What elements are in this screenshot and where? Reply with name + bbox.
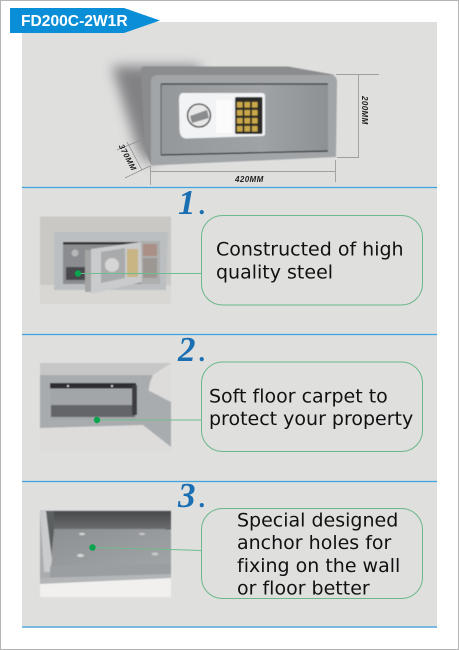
dimension 370MM: 370MM (117, 143, 138, 172)
keypad (235, 97, 262, 134)
lock panel (179, 93, 265, 138)
callout line (78, 272, 202, 274)
callout line (97, 419, 202, 421)
section 3 photo (40, 510, 171, 597)
section divider lines (22, 188, 437, 627)
section 1 photo (40, 216, 171, 304)
callout box (202, 362, 422, 452)
callout text: anchor holes for (237, 532, 392, 554)
dimension 200MM: 200MM (360, 95, 369, 125)
callout box (202, 508, 422, 598)
product photo: safe with dimensions (112, 66, 379, 185)
knob (188, 104, 210, 127)
section 2 callout (94, 362, 423, 452)
callout text: Soft floor carpet to (209, 386, 388, 408)
section 3 number: 3. (177, 476, 205, 515)
section 3 callout (89, 508, 423, 600)
callout line (92, 548, 202, 550)
callout text: or floor better (237, 578, 370, 600)
dimension 420MM: 420MM (234, 175, 264, 184)
model banner (10, 8, 160, 33)
marker dot (89, 544, 96, 551)
section 2 number: 2. (177, 330, 205, 369)
model banner: FD200C-2W1R (21, 13, 128, 30)
safe shadow (112, 66, 200, 165)
callout text: quality steel (216, 262, 333, 284)
callout box (202, 216, 422, 305)
section 2 photo (40, 363, 171, 451)
callout text: protect your property (209, 408, 413, 430)
section 1 number: 1. (178, 183, 205, 222)
callout text: Special designed (237, 510, 398, 532)
marker dot (75, 270, 81, 277)
callout text: fixing on the wall (237, 555, 400, 577)
safe body (141, 66, 337, 166)
marker dot (94, 417, 100, 423)
dimension lines (117, 74, 379, 185)
section 1 callout (75, 216, 423, 305)
callout text: Constructed of high (216, 238, 404, 260)
